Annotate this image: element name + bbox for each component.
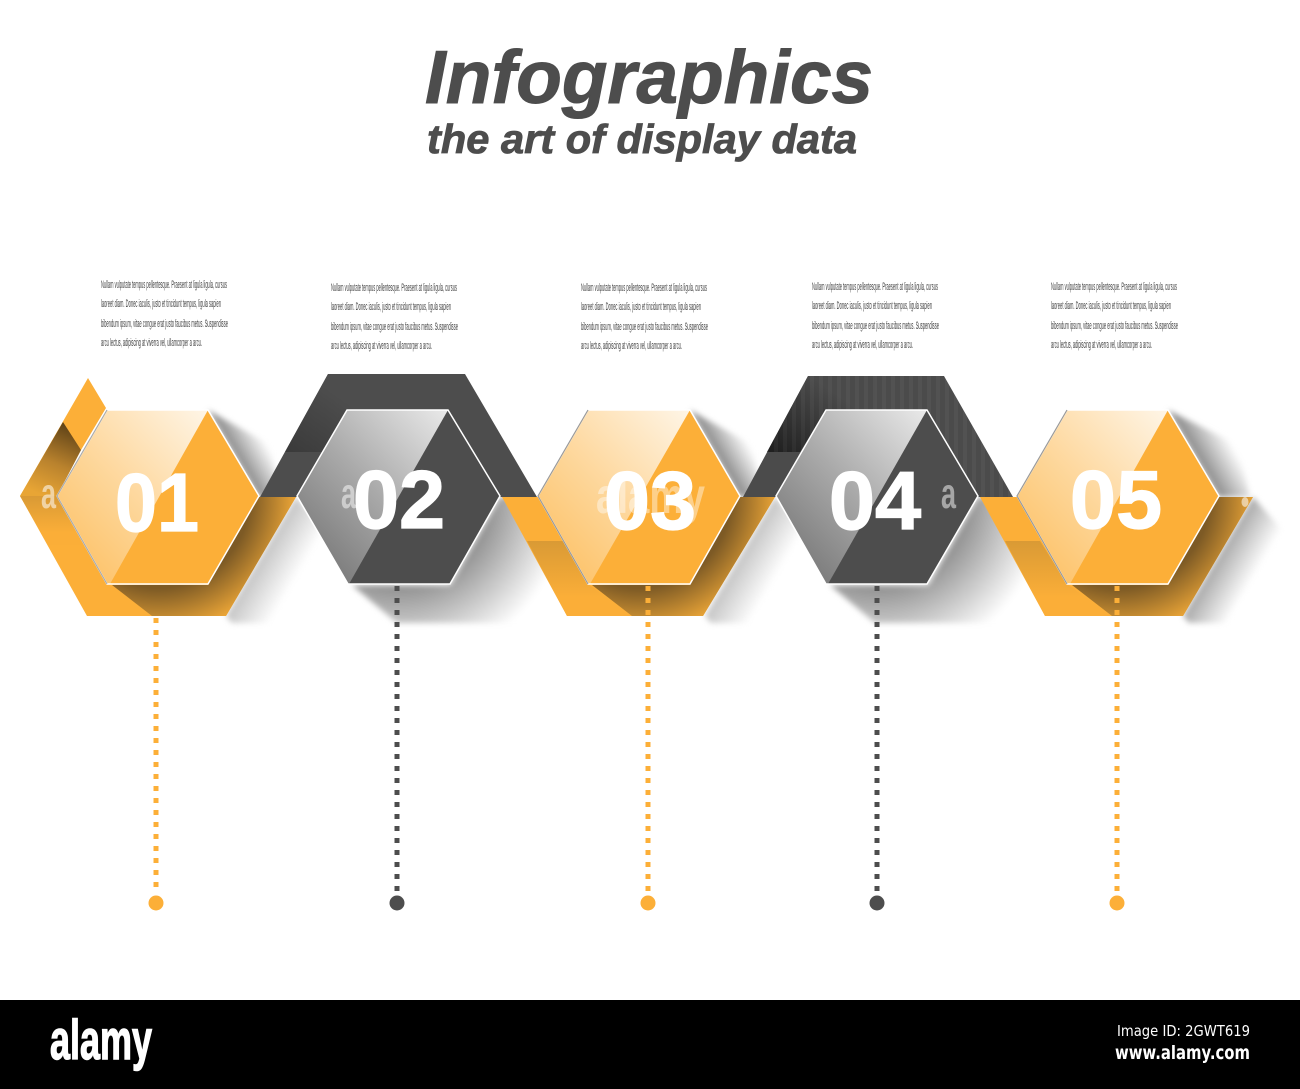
text block 5: [1051, 281, 1178, 351]
text: arcu lectus, adipiscing at viverra vel, ullamcorper a arcu.: [812, 339, 913, 351]
hexagon 02: a: [341, 470, 357, 518]
dark ribbon around hexagon 4: [743, 376, 1013, 497]
text: laoreet diam. Donec iaculis, justo et tincidunt tempus, ligula sapien: [331, 301, 451, 313]
hexagon 01: [57, 410, 259, 585]
connector: dotted line and end dot 3: [640, 586, 656, 910]
text: Nullam vulputate tempus pellentesque. Praesent at ligula ligula, cursus: [581, 282, 707, 294]
text block 3: [581, 282, 708, 352]
text: Nullam vulputate tempus pellentesque. Praesent at ligula ligula, cursus: [331, 282, 457, 294]
connector: dotted line and end dot 1: [148, 618, 164, 910]
footer logo: alamy: [50, 1008, 152, 1071]
text: bibendum ipsum, vitae congue erat justo faucibus metus. Suspendisse: [812, 320, 939, 332]
text: bibendum ipsum, vitae congue erat justo faucibus metus. Suspendisse: [331, 321, 458, 333]
watermark letter on ribbon 1: a: [41, 470, 57, 518]
hexagon 05: 05: [1070, 453, 1162, 546]
connector: dotted line and end dot 5: [1110, 586, 1124, 910]
hexagon 03: alamy: [596, 468, 705, 524]
image id: Image ID: 2GWT619: [1117, 1022, 1250, 1040]
website: www.alamy.com: [1115, 1042, 1250, 1064]
text: arcu lectus, adipiscing at viverra vel, ullamcorper a arcu.: [331, 340, 432, 352]
hexagon 04: a: [941, 470, 957, 518]
dark ribbon around hexagon 2: [260, 374, 537, 497]
text: Nullam vulputate tempus pellentesque. Praesent at ligula ligula, cursus: [812, 281, 938, 293]
text: arcu lectus, adipiscing at viverra vel, ullamcorper a arcu.: [581, 340, 682, 352]
hexagon 04: [776, 410, 978, 585]
text: laoreet diam. Donec iaculis, justo et tincidunt tempus, ligula sapien: [101, 298, 221, 310]
hexagon 03: [538, 410, 740, 585]
connector: dotted line and end dot 2: [390, 586, 404, 910]
text block 1: [101, 279, 228, 349]
footer bar: [0, 1000, 1300, 1089]
hexagon 01: 01: [115, 456, 199, 549]
text: Nullam vulputate tempus pellentesque. Praesent at ligula ligula, cursus: [101, 279, 227, 291]
text block 2: [331, 282, 458, 352]
text: bibendum ipsum, vitae congue erat justo faucibus metus. Suspendisse: [101, 318, 228, 330]
text: laoreet diam. Donec iaculis, justo et tincidunt tempus, ligula sapien: [812, 300, 932, 312]
hexagon 02: [297, 410, 500, 585]
orange ribbon around hexagon 3: [502, 497, 775, 616]
drop shadows behind the ribbon: [208, 410, 1282, 623]
hexagon 03: 03: [604, 454, 696, 547]
hexagon 05: [1017, 410, 1219, 585]
connector: dotted line and end dot 4: [870, 586, 884, 910]
text block 4: [812, 281, 939, 351]
title: Infographics: [425, 35, 873, 119]
text: laoreet diam. Donec iaculis, justo et tincidunt tempus, ligula sapien: [581, 301, 701, 313]
hexagon 04: 04: [829, 454, 921, 547]
text: bibendum ipsum, vitae congue erat justo faucibus metus. Suspendisse: [581, 321, 708, 333]
orange ribbon around hexagon 1: [20, 378, 296, 616]
subtitle: the art of display data: [427, 116, 857, 162]
text: arcu lectus, adipiscing at viverra vel, ullamcorper a arcu.: [101, 337, 202, 349]
hexagon 02: 02: [353, 453, 445, 546]
orange ribbon around hexagon 5: [980, 497, 1253, 616]
